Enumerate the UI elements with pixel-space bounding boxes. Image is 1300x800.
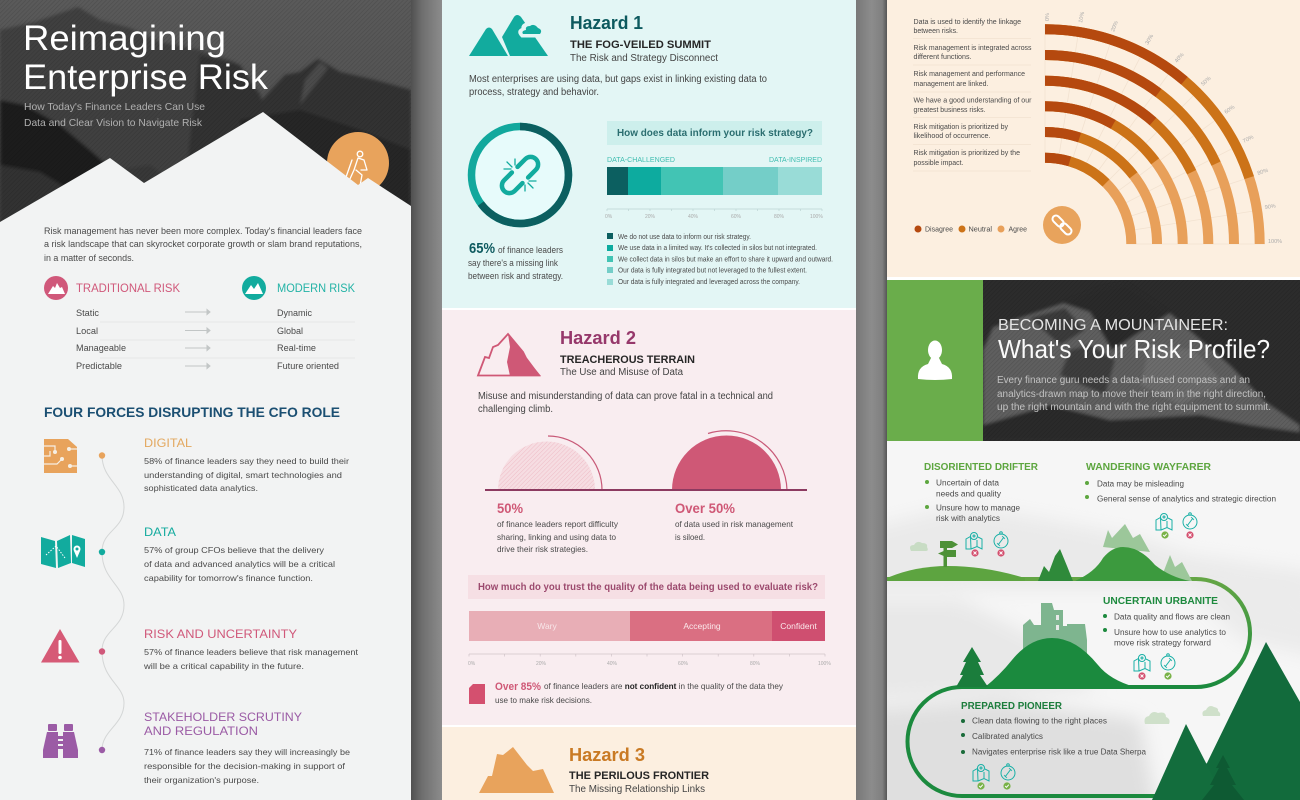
hazard 3 heading: Hazard 3 xyxy=(569,745,645,765)
subtitle: Data and Clear Vision to Navigate Risk xyxy=(24,117,203,129)
stacked bar: trust: 20% xyxy=(536,661,547,667)
radial axis labels xyxy=(1045,11,1282,245)
profile: disoriented drifter: needs and quality xyxy=(936,490,1001,498)
row labels: likelihood of occurrence. xyxy=(914,133,991,140)
force: risk and uncertainty xyxy=(143,627,359,671)
stacked bar chart: DATA-CHALLENGED xyxy=(607,155,676,164)
profile: prepared pioneer: PREPARED PIONEER xyxy=(961,700,1062,712)
chart: over 50% semicircle xyxy=(672,431,787,490)
profile: wandering wayfarer: Data may be misleading xyxy=(1097,480,1184,488)
radial axis labels: 100% xyxy=(1268,239,1282,245)
radial axis labels: 60% xyxy=(1224,104,1236,116)
legend: data use: We use data in a limited way. It's collected in silos but not integrated. xyxy=(618,245,817,252)
title: Reimagining xyxy=(23,19,226,58)
chart: 50% semicircle xyxy=(498,436,602,490)
profile: prepared pioneer: Navigates enterprise risk like a true Data Sherpa xyxy=(972,748,1147,756)
comparison rows: Global xyxy=(277,326,303,336)
panel: relationship links chart xyxy=(887,0,1300,277)
hazard 2 description xyxy=(478,391,773,415)
stacked bar chart: 60% xyxy=(731,214,742,220)
stacked bar chart xyxy=(605,155,823,220)
force: digital: sophisticated data analytics. xyxy=(144,483,258,493)
legend: data use xyxy=(607,233,833,286)
force: data: of data and advanced analytics will be a critical xyxy=(144,559,335,569)
stat: 65%: say there's a missing link xyxy=(468,258,558,268)
stacked bar: trust: Accepting xyxy=(683,621,721,631)
stat: over 50%: is siloed. xyxy=(675,532,705,542)
stat: over 50%: Over 50% xyxy=(675,500,736,516)
profile: wandering wayfarer xyxy=(1085,461,1276,539)
icon: map xyxy=(41,535,85,568)
force: risk and uncertainty: RISK AND UNCERTAINTY xyxy=(144,627,297,641)
profile: prepared pioneer xyxy=(961,700,1147,790)
force: stakeholder scrutiny: STAKEHOLDER SCRUTINY xyxy=(144,710,302,724)
profile heading: BECOMING A MOUNTAINEER: xyxy=(998,317,1228,334)
comparison rows: Dynamic xyxy=(277,308,312,318)
row labels: Risk management and performance xyxy=(914,71,1025,78)
force: stakeholder scrutiny xyxy=(144,710,350,785)
force: digital: DIGITAL xyxy=(144,436,192,450)
hazard 2 heading xyxy=(560,328,695,378)
callout: over 85% xyxy=(495,681,784,705)
row labels: Data is used to identify the linkage xyxy=(914,19,1021,26)
legend: agreement: Agree xyxy=(1008,226,1027,234)
stacked bar chart: DATA-INSPIRED xyxy=(769,155,823,164)
legend: agreement: Neutral xyxy=(968,226,992,234)
intro paragraph: a risk landscape that can skyrocket corporate growth or slam brand reputations, xyxy=(44,239,362,249)
hazard 3 heading: THE PERILOUS FRONTIER xyxy=(569,770,709,782)
icon: digital circuit xyxy=(44,439,77,473)
white divider between hazards xyxy=(442,725,856,727)
stat: 50% xyxy=(497,500,619,554)
hazard 1 heading: Hazard 1 xyxy=(570,13,643,33)
stat: 50%: sharing, linking and using data to xyxy=(497,532,616,542)
icon: hiker badge xyxy=(327,132,389,194)
modern risk heading xyxy=(242,276,355,300)
hazard 1 description: process, strategy and behavior. xyxy=(469,87,599,98)
icons: map and compass xyxy=(966,532,1008,557)
stacked bar chart: 100% xyxy=(810,214,823,220)
icon: frontier mountain xyxy=(479,747,554,793)
profile description: up the right mountain and with the right equipment to summit. xyxy=(997,402,1271,413)
row labels: Risk management is integrated across xyxy=(914,45,1032,52)
row labels: management are linked. xyxy=(914,81,989,88)
question banner xyxy=(468,575,825,599)
baseline xyxy=(485,489,807,491)
radial axis labels: 30% xyxy=(1145,33,1155,46)
stacked bar chart: 20% xyxy=(645,214,656,220)
profile: prepared pioneer: Clean data flowing to the right places xyxy=(972,716,1107,726)
snowy mountain silhouette xyxy=(0,112,411,225)
legend: agreement: Disagree xyxy=(925,226,953,234)
stat: 65%: 65% xyxy=(469,240,495,257)
profile: uncertain urbanite: Unsure how to use analytics to xyxy=(1114,628,1227,637)
radial axis labels: 0% xyxy=(1045,13,1051,21)
title: Enterprise Risk xyxy=(23,58,269,97)
modern risk heading: MODERN RISK xyxy=(277,281,355,295)
callout: over 85%: use to make risk decisions. xyxy=(495,695,592,705)
legend: data use: Our data is fully integrated and leveraged across the company. xyxy=(618,279,800,286)
icon: binoculars xyxy=(43,724,78,758)
hazard 1 heading: The Risk and Strategy Disconnect xyxy=(570,53,718,64)
intro paragraph xyxy=(44,226,362,263)
profile: disoriented drifter xyxy=(924,461,1038,557)
hazard 2 description: challenging climb. xyxy=(478,404,553,415)
profile: wandering wayfarer: WANDERING WAYFARER xyxy=(1086,461,1211,473)
profile: uncertain urbanite xyxy=(1103,595,1230,680)
stacked bar: trust xyxy=(468,611,831,667)
force: risk and uncertainty: 57% of finance leaders believe that risk management xyxy=(144,647,359,657)
comparison rows: Predictable xyxy=(76,361,122,371)
icon: warning triangle xyxy=(41,629,80,662)
profile: uncertain urbanite: Data quality and flows are clean xyxy=(1114,612,1230,622)
radial axis labels: 80% xyxy=(1257,168,1269,177)
force: stakeholder scrutiny: their organization's purpose. xyxy=(144,775,259,785)
radial bar chart xyxy=(1045,11,1282,245)
force: data: DATA xyxy=(144,525,176,539)
profile: uncertain urbanite: move risk strategy forward xyxy=(1114,638,1211,648)
profile: disoriented drifter: Unsure how to manage xyxy=(936,504,1021,512)
hazard 2 heading: The Use and Misuse of Data xyxy=(560,367,683,378)
radial axis labels: 20% xyxy=(1110,20,1120,33)
hills and trees: wayfarer xyxy=(1038,524,1192,581)
legend: data use: Our data is fully integrated but not leveraged to the fullest extent. xyxy=(618,268,807,274)
subtitle xyxy=(24,101,205,129)
stat: over 50%: of data used in risk management xyxy=(675,519,794,529)
force: data: 57% of group CFOs believe that the delivery xyxy=(144,545,325,555)
profile: wandering wayfarer: General sense of analytics and strategic direction xyxy=(1097,494,1276,504)
panel: risk profiles landscape xyxy=(860,441,1300,800)
mountains: pioneer xyxy=(1144,642,1300,800)
hills and buildings: urbanite xyxy=(956,603,1135,687)
hazard 2 heading: Hazard 2 xyxy=(560,328,636,348)
stat: 65%: of finance leaders xyxy=(498,245,563,255)
row labels: Risk mitigation is prioritized by xyxy=(914,124,1008,131)
profile heading: What's Your Risk Profile? xyxy=(998,334,1270,364)
traditional risk heading xyxy=(44,276,180,300)
profile: prepared pioneer: Calibrated analytics xyxy=(972,732,1043,741)
radial axis labels: 70% xyxy=(1242,134,1255,145)
legend: data use: We do not use data to inform our risk strategy. xyxy=(618,234,751,241)
icon: fog mountain xyxy=(469,15,548,56)
radial axis labels: 90% xyxy=(1264,203,1276,211)
heading: four forces: FOUR FORCES DISRUPTING THE CFO ROLE xyxy=(44,404,340,420)
stat: 65%: between risk and strategy. xyxy=(468,271,563,281)
row labels: We have a good understanding of our xyxy=(914,98,1032,104)
panel: hazard 3 xyxy=(442,727,856,800)
panel: hazard 2 xyxy=(442,310,856,725)
force: digital: 58% of finance leaders say they need to build their xyxy=(144,456,349,466)
white divider between hazards xyxy=(442,308,856,310)
comparison rows xyxy=(76,308,355,371)
row labels: different functions. xyxy=(914,54,972,61)
stacked bar: trust: 80% xyxy=(750,661,761,667)
traditional risk heading: TRADITIONAL RISK xyxy=(76,281,180,295)
stacked bar: trust: Wary xyxy=(537,621,558,631)
icons: map and compass xyxy=(1134,654,1175,680)
row labels: between risks. xyxy=(914,28,958,35)
stacked bar chart: 40% xyxy=(688,214,699,220)
stacked bar: trust: 0% xyxy=(468,661,476,667)
comparison rows: Future oriented xyxy=(277,361,339,371)
force: data: capability for tomorrow's finance function. xyxy=(144,573,313,583)
callout: over 85%: of finance leaders are not confident in the quality of the data they xyxy=(544,681,784,691)
question banner: How much do you trust the quality of the data being used to evaluate risk? xyxy=(478,581,818,593)
radial axis labels: 10% xyxy=(1078,11,1086,23)
row labels xyxy=(913,19,1032,171)
row labels: possible impact. xyxy=(914,160,964,167)
stat: 50%: of finance leaders report difficulty xyxy=(497,519,619,529)
comparison rows: Static xyxy=(76,308,100,318)
mountain photo banner xyxy=(0,0,411,225)
row labels: greatest business risks. xyxy=(914,107,986,114)
radial axis labels: 40% xyxy=(1174,52,1186,64)
force: risk and uncertainty: will be a critical capability in the future. xyxy=(143,661,304,671)
force: stakeholder scrutiny: AND REGULATION xyxy=(144,724,258,738)
hazard 3 heading xyxy=(569,745,709,795)
comparison rows: Manageable xyxy=(76,343,126,353)
stacked bar chart: 0% xyxy=(605,214,613,220)
subtitle: How Today's Finance Leaders Can Use xyxy=(24,101,205,113)
profile description xyxy=(997,375,1271,413)
intro paragraph: in a matter of seconds. xyxy=(44,253,134,263)
hills and trees: drifter xyxy=(887,541,1025,581)
stacked bar: trust: 60% xyxy=(678,661,689,667)
icon: chain badge xyxy=(1043,206,1081,244)
callout: over 85%: Over 85% xyxy=(495,681,541,693)
legend: agreement xyxy=(914,226,1027,234)
row labels: Risk mitigation is prioritized by the xyxy=(914,150,1020,157)
stacked bar: trust: 40% xyxy=(607,661,618,667)
force: stakeholder scrutiny: responsible for the decision-making in support of xyxy=(144,761,346,771)
hazard 2 description: Misuse and misunderstanding of data can prove fatal in a technical and xyxy=(478,391,773,402)
radial axis labels: 50% xyxy=(1200,76,1213,87)
panel: risk profile header xyxy=(887,277,1300,441)
profile: uncertain urbanite: UNCERTAIN URBANITE xyxy=(1103,595,1218,607)
comparison rows: Real-time xyxy=(277,343,316,353)
hazard 2 heading: TREACHEROUS TERRAIN xyxy=(560,354,695,366)
profile: disoriented drifter: risk with analytics xyxy=(936,514,1000,523)
icon: treacherous peak xyxy=(478,334,541,376)
arrows xyxy=(185,310,210,368)
force: digital xyxy=(144,436,349,493)
icons: map and compass xyxy=(973,764,1015,790)
profile: disoriented drifter: Uncertain of data xyxy=(936,478,1000,488)
profile description: analytics-drawn map to move their team in the right direction, xyxy=(997,389,1266,400)
stat: over 50% xyxy=(675,500,794,542)
title xyxy=(23,19,269,97)
hazard 1 heading xyxy=(570,13,718,64)
stat: 50%: 50% xyxy=(497,500,524,516)
icon: signpost xyxy=(938,541,958,567)
panel: intro column xyxy=(0,0,411,800)
hazard 1 heading: THE FOG-VEILED SUMMIT xyxy=(570,39,711,51)
icon: person xyxy=(918,340,952,380)
hazard 1 description xyxy=(469,74,767,98)
profile: disoriented drifter: DISORIENTED DRIFTER xyxy=(924,461,1038,473)
stacked bar: trust: Confident xyxy=(780,621,817,631)
icon: broken link xyxy=(499,154,541,196)
trail path xyxy=(887,579,1250,796)
stacked bar: trust: 100% xyxy=(818,661,831,667)
stat: 50%: drive their risk strategies. xyxy=(497,544,588,554)
force: data xyxy=(144,525,335,583)
question banner: How does data inform your risk strategy? xyxy=(617,127,813,139)
icons: map and compass xyxy=(1156,513,1197,539)
panel: hazard 1 xyxy=(442,0,856,308)
intro paragraph: Risk management has never been more complex. Today's financial leaders face xyxy=(44,226,362,236)
stat: 65% xyxy=(468,240,563,281)
misty background mountains xyxy=(860,505,1300,800)
donut chart: 65% xyxy=(472,126,568,224)
hazard 3 heading: The Missing Relationship Links xyxy=(569,784,705,795)
stacked bar chart: 80% xyxy=(774,214,785,220)
icon: document xyxy=(469,684,485,704)
force: stakeholder scrutiny: 71% of finance leaders say they will increasingly be xyxy=(144,747,350,757)
dark mountain photo xyxy=(983,280,1300,441)
legend: data use: We collect data in silos but make an effort to share it upward and outward. xyxy=(618,256,833,264)
question banner xyxy=(607,121,822,145)
hazard 1 description: Most enterprises are using data, but gaps exist in linking existing data to xyxy=(469,74,767,85)
force: digital: understanding of digital, smart technologies and xyxy=(144,470,342,480)
comparison rows: Local xyxy=(76,326,98,336)
cloud xyxy=(910,542,928,551)
profile heading xyxy=(998,317,1270,364)
profile description: Every finance guru needs a data-infused compass and an xyxy=(997,375,1250,386)
timeline connector xyxy=(99,452,124,753)
